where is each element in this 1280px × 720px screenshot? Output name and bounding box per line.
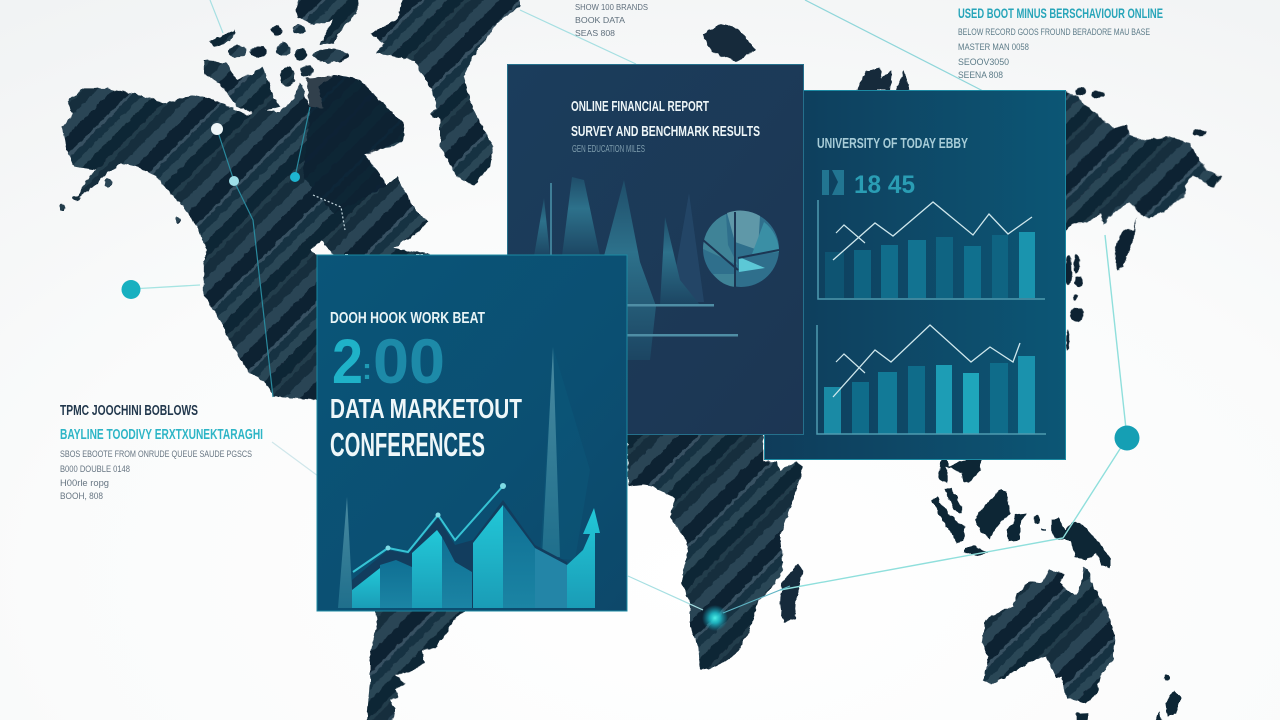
- front panel background: [317, 255, 627, 611]
- front panel title line 2: CONFERENCES: [330, 426, 485, 463]
- left details: [60, 449, 252, 502]
- front panel chart: [338, 347, 600, 608]
- right panel heading: UNIVERSITY OF TODAY EBBY: [817, 135, 968, 152]
- node: north america 1: [211, 123, 223, 135]
- text block: left: [60, 403, 263, 502]
- south america: [365, 607, 472, 720]
- right panel background: [764, 90, 1066, 460]
- front panel big number: :: [362, 353, 372, 386]
- africa: [627, 430, 803, 670]
- top right details: SEENA 808: [958, 70, 1003, 81]
- right panel number: 18 45: [854, 171, 915, 199]
- panel: right dashboard: [764, 90, 1066, 460]
- node: north america 2: [229, 176, 239, 186]
- connection lines: [131, 0, 1127, 613]
- node: north america 3: [290, 172, 300, 182]
- node: left: [122, 280, 140, 299]
- center panel caption: GEN EDUCATION MILES: [572, 144, 645, 155]
- left subheading: BAYLINE TOODIVY ERXTXUNEKTARAGHI: [60, 427, 263, 443]
- madagascar: [780, 563, 803, 623]
- top right details: SEOOV3050: [958, 57, 1009, 68]
- panel: front conferences: [317, 255, 627, 611]
- iceland and north europe fragments: [702, 24, 910, 90]
- greenland: [370, 0, 520, 185]
- left details: SBOS EBOOTE FROM ONRUDE QUEUE SAUDE PGSCS: [60, 449, 252, 460]
- center panel heading line 1: ONLINE FINANCIAL REPORT: [571, 98, 709, 115]
- lower bar chart: [817, 325, 1046, 434]
- text block: top right: [958, 5, 1163, 81]
- text block: top center: SHOW 100 BRANDS: [575, 3, 648, 12]
- north america: [59, 75, 433, 400]
- southeast asia: [932, 457, 1110, 568]
- australia: [982, 567, 1115, 703]
- eurasia east: [1063, 88, 1222, 350]
- node: africa glow: [702, 605, 728, 631]
- upper bar chart: [818, 200, 1045, 299]
- front panel big number: 00: [373, 327, 445, 397]
- new zealand and tasmania: [1077, 674, 1182, 720]
- icon: small chart mark: [822, 170, 844, 195]
- panel: center report: [508, 64, 804, 434]
- left details: BOOH, 808: [60, 491, 103, 502]
- center panel heading line 2: SURVEY AND BENCHMARK RESULTS: [571, 123, 760, 140]
- text block: top center: [575, 3, 648, 38]
- front panel big number: [332, 327, 445, 397]
- node: right: [1114, 426, 1140, 450]
- pie globe: [703, 211, 779, 287]
- left details: B000 DOUBLE 0148: [60, 464, 130, 475]
- top right heading: USED BOOT MINUS BERSCHAVIOUR ONLINE: [958, 5, 1163, 21]
- top right details: [958, 27, 1150, 81]
- text block: top center: BOOK DATA: [575, 16, 626, 25]
- top right details: MASTER MAN 0058: [958, 42, 1029, 53]
- front panel big number: 2: [332, 327, 363, 397]
- arctic islands: [203, 0, 360, 113]
- top right details: BELOW RECORD GOOS FROUND BERADORE MAU BASE: [958, 27, 1150, 38]
- text block: top center: SEAS 808: [575, 29, 616, 38]
- front panel title line 1: DATA MARKETOUT: [330, 393, 522, 424]
- left heading: TPMC JOOCHINI BOBLOWS: [60, 403, 198, 419]
- center panel background: [508, 64, 804, 434]
- front panel kicker: DOOH HOOK WORK BEAT: [330, 310, 485, 327]
- spike chart: [534, 177, 738, 360]
- left details: H00rle ropg: [60, 478, 109, 489]
